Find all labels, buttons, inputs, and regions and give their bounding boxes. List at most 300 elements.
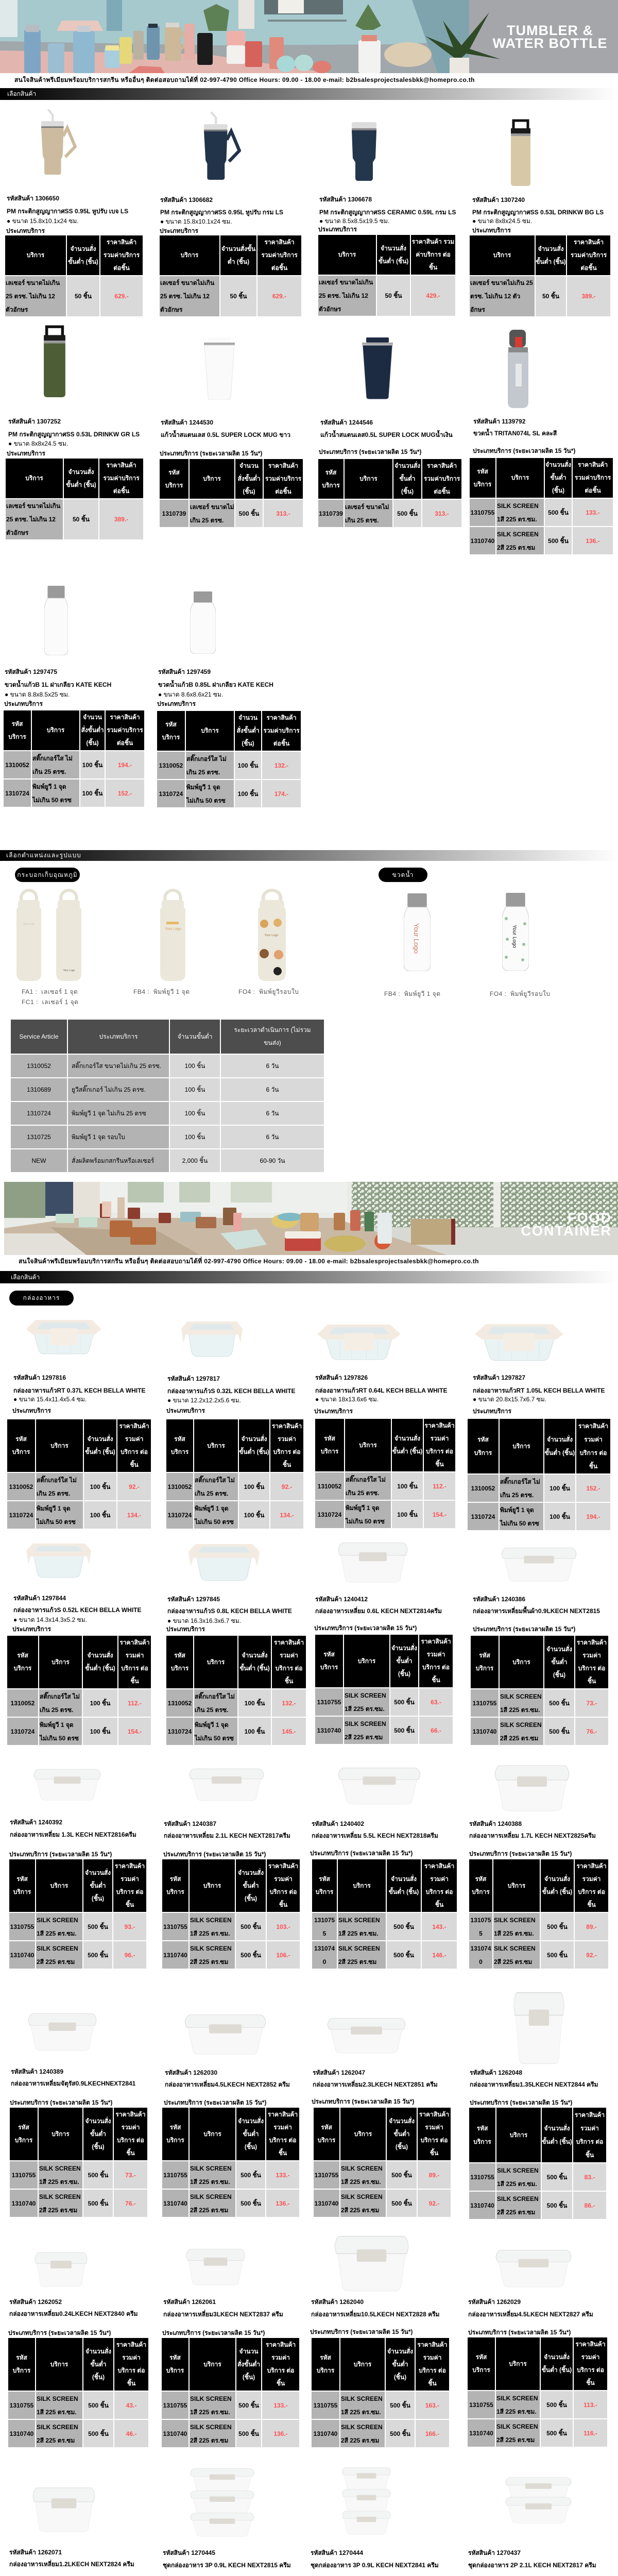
service table: รหัส bbox=[174, 1652, 185, 1659]
service table: รหัส bbox=[174, 1435, 185, 1443]
icon: glass bottle with floral print: Your Logo bbox=[511, 925, 517, 948]
service table: บริการ bbox=[359, 1442, 377, 1449]
product code: รหัสสินค้า 1240388 bbox=[469, 1820, 522, 1827]
service summary table: พิมพ์ยูวี 1 จุด ไม่เกิน 25 ตรซ bbox=[72, 1110, 146, 1117]
service table: 500 ชิ้น bbox=[547, 2202, 567, 2209]
product name: กล่องอาหารเหลี่ยม 1.7L KECH NEXT2825ครีม bbox=[469, 1832, 596, 1839]
service table: 131074 bbox=[314, 1944, 335, 1952]
service table: พิมพ์ยูวี 1 จุด bbox=[40, 1721, 74, 1728]
service table: รวมค่าบริการ bbox=[575, 474, 611, 481]
service table: ตรซ. ไม่เกิน 12 ตัว bbox=[470, 293, 520, 300]
service table: เกิน 25 ตรซ. bbox=[32, 768, 66, 775]
service table: 76.- bbox=[587, 1728, 597, 1735]
service heading: ประเภทบริการ bbox=[12, 1407, 51, 1414]
service table: จำนวนสั่ง bbox=[70, 245, 96, 252]
icon: thermos with base logo bbox=[56, 889, 81, 981]
service table: ต่อชิ้น bbox=[580, 264, 597, 272]
service table: ชิ้น bbox=[429, 264, 437, 271]
service table: 1สี 225 ตร.ซม. bbox=[341, 2178, 381, 2185]
product name: กล่องอาหารเหลี่ยม4.5LKECH NEXT2852 ครีม bbox=[165, 2081, 290, 2088]
service table: 133.- bbox=[273, 2402, 288, 2409]
service table: 1สี 225 ตร.ซม. bbox=[190, 1930, 230, 1937]
service table: 500 ชิ้น bbox=[88, 2171, 108, 2178]
service heading: ประเภทบริการ (ระยะเวลาผลิต 15 วัน*) bbox=[473, 1625, 575, 1633]
service table: 166.- bbox=[425, 2430, 439, 2437]
service table: 132.- bbox=[282, 1699, 296, 1706]
service table: บริการ bbox=[171, 1665, 188, 1672]
service heading: ประเภทบริการ bbox=[318, 226, 357, 233]
product size: ● ขนาด 15.4x11.4x5.4 ซม. bbox=[13, 1396, 87, 1403]
product name: กล่องอาหารเหลี่ยม2.3LKECH NEXT2851 ครีม bbox=[313, 2081, 438, 2088]
service table: SILK SCREEN bbox=[338, 1944, 380, 1952]
service table: 1สี 225 ตร.ซม. bbox=[494, 1930, 534, 1937]
service heading: ประเภทบริการ (ระยะเวลาผลิต 15 วัน*) bbox=[473, 447, 575, 454]
service table: SILK SCREEN bbox=[338, 1917, 380, 1924]
service table: รหัส bbox=[475, 1875, 486, 1883]
product card 1297817 bbox=[166, 1320, 303, 1529]
service table: ค่าบริการ ต่อ bbox=[416, 251, 451, 258]
service table: รวมค่า bbox=[431, 1435, 449, 1442]
service table: 1310755 bbox=[12, 2171, 36, 2178]
service table: ไม่เกิน 50 ตรซ bbox=[195, 1734, 234, 1741]
service table: (ชิ้น) bbox=[86, 739, 99, 747]
service table: บริการ bbox=[47, 726, 64, 734]
service table: SILK SCREEN bbox=[341, 2424, 383, 2431]
service table: 500 ชิ้น bbox=[393, 1952, 414, 1959]
service table: 1310755 bbox=[470, 2173, 494, 2180]
service summary table: 1310052 bbox=[27, 1062, 51, 1070]
product card 1297844 bbox=[7, 1543, 151, 1746]
service table: บริการ ต่อ bbox=[576, 2138, 603, 2145]
service heading: ประเภทบริการ bbox=[166, 1407, 205, 1414]
product code: รหัสสินค้า 1270437 bbox=[468, 2549, 521, 2556]
service table: เกิน 25 ตรซ. bbox=[190, 516, 224, 523]
service table: ราคาสินค้า bbox=[268, 2111, 298, 2118]
service table: พิมพ์ยูวี 1 จุด bbox=[346, 1504, 380, 1512]
product name: ขวดน้ำแก้วB 1L ฝาเกลียว KATE KECH bbox=[5, 681, 111, 688]
service table: จำนวนสั่ง bbox=[241, 1435, 267, 1443]
service table: 1310052 bbox=[318, 1483, 341, 1490]
service heading: ประเภทบริการ (ระยะเวลาผลิต 15 วัน*) bbox=[470, 2099, 572, 2106]
service table: รหัส bbox=[320, 2354, 331, 2361]
service table: ต่ำ (ชิ้น) bbox=[228, 258, 249, 265]
product size: ● ขนาด 18x13.6x6 ซม. bbox=[315, 1396, 379, 1403]
product code: รหัสสินค้า 1240392 bbox=[10, 1819, 62, 1826]
service table: ชิ้น bbox=[430, 2149, 438, 2157]
product card 1262047 bbox=[312, 2017, 451, 2218]
service table: 1310724 bbox=[318, 1511, 341, 1518]
section bar: choose product bbox=[0, 88, 618, 100]
service table: SILK SCREEN bbox=[500, 1721, 542, 1728]
service table: ราคาสินค้า bbox=[266, 2341, 296, 2348]
service table: (ชิ้น) bbox=[242, 740, 254, 747]
service table: 500 ชิ้น bbox=[241, 1923, 261, 1930]
service table: รหัส bbox=[16, 2354, 27, 2361]
service table: บริการ bbox=[203, 1882, 221, 1889]
service table: จำนวนสั่ง bbox=[389, 2117, 415, 2125]
service table: ชิ้น bbox=[130, 1461, 139, 1468]
photo: tall plastic container bbox=[513, 1990, 564, 2064]
service table bbox=[5, 235, 143, 316]
service table: (ชิ้น) bbox=[92, 2143, 105, 2150]
service table: 145.- bbox=[282, 1728, 296, 1735]
service table: 500 ชิ้น bbox=[547, 1923, 568, 1930]
service table: จำนวนสั่ง bbox=[547, 1436, 573, 1443]
service summary table: 100 ชิ้น bbox=[185, 1086, 205, 1093]
service table: บริการ ต่อ bbox=[269, 2137, 296, 2144]
service table: บริการ bbox=[472, 2366, 490, 2374]
service table: 103.- bbox=[276, 1923, 290, 1930]
service table: รวมค่า bbox=[425, 2124, 443, 2131]
service table: 500 ชิ้น bbox=[397, 510, 418, 517]
service table: ไม่เกิน 50 ตรซ bbox=[37, 1518, 76, 1525]
photo: glass food box bbox=[475, 1323, 563, 1361]
section bar: choose position and style: เลือกตำแหน่งและรูปแบบ bbox=[6, 852, 81, 859]
photo: plastic food box bbox=[334, 2234, 409, 2292]
product card 1297827 bbox=[468, 1323, 610, 1532]
service table: (ชิ้น) bbox=[245, 2143, 257, 2150]
service table: SILK SCREEN bbox=[497, 2195, 539, 2202]
service table: จำนวนสั่ง bbox=[68, 468, 94, 475]
service table: 152.- bbox=[118, 789, 132, 796]
service summary table: 1310689 bbox=[27, 1086, 51, 1093]
service table: 1310724 bbox=[159, 790, 183, 798]
product code: รหัสสินค้า 1270445 bbox=[163, 2549, 215, 2556]
service table: 500 ชิ้น bbox=[88, 1923, 108, 1930]
service table: (ชิ้น) bbox=[243, 2373, 255, 2380]
service table: 0 bbox=[479, 1958, 483, 1965]
service table: สติ๊กเกอร์ใส ไม่ bbox=[186, 755, 227, 762]
service table: 1สี 225 ตร.ซม. bbox=[190, 2178, 230, 2185]
product card 1262071 bbox=[8, 2486, 145, 2576]
service table: บริการ bbox=[353, 1882, 371, 1889]
photo: navy mug bbox=[362, 337, 393, 399]
service table: ชิ้น bbox=[127, 2380, 135, 2387]
product name: กล่องอาหารแก้วS 0.52L KECH BELLA WHITE bbox=[13, 1606, 141, 1614]
icon: glass bottle with logo bbox=[404, 893, 431, 971]
service table: ต่อชิ้น bbox=[271, 264, 287, 272]
product code: รหัสสินค้า 1270444 bbox=[311, 2549, 363, 2556]
service table: 1310740 bbox=[12, 2200, 36, 2207]
service table: บริการ ต่อ bbox=[276, 1665, 302, 1672]
service table: บริการ bbox=[354, 2130, 372, 2137]
service table: ต่อชิ้น bbox=[113, 264, 130, 272]
service table: บริการ bbox=[181, 251, 198, 259]
service table: 132.- bbox=[274, 761, 288, 769]
service table: 100 ชิ้น bbox=[90, 1728, 110, 1735]
service heading: ประเภทบริการ bbox=[12, 1625, 51, 1633]
photo: plastic food box bbox=[494, 1764, 570, 1811]
hero banner: food container kitchen scene bbox=[4, 1182, 618, 1255]
service table: 500 ชิ้น bbox=[393, 1923, 414, 1930]
service table: ราคาสินค้า bbox=[577, 1639, 607, 1646]
service table: (ชิ้น) bbox=[92, 1895, 104, 1902]
product code: รหัสสินค้า 1262048 bbox=[470, 2069, 522, 2076]
service table: ต่อชิ้น bbox=[117, 739, 133, 747]
service table: บริการ bbox=[509, 2360, 527, 2367]
service table bbox=[160, 459, 303, 527]
service table: รวมค่า bbox=[584, 1436, 603, 1443]
label: FB4 UV: FB4 : พิมพ์ยูวี 1 จุด bbox=[384, 990, 441, 997]
service table: SILK SCREEN bbox=[341, 2165, 383, 2172]
service table bbox=[314, 1418, 456, 1529]
service table: รวมค่าบริการ bbox=[424, 475, 460, 482]
service table: สั่งขั้นต่ำ bbox=[237, 2361, 260, 2368]
banner title: tumbler and water bottle: TUMBLER & bbox=[507, 23, 593, 38]
product name: กล่องอาหารแก้วRT 1.05L KECH BELLA WHITE bbox=[473, 1387, 605, 1394]
photo: square glass food box bbox=[188, 1543, 260, 1581]
product card 1240386 bbox=[471, 1547, 608, 1746]
service table: บริการ ต่อ bbox=[121, 1448, 148, 1455]
service table: 500 ชิ้น bbox=[88, 2430, 109, 2437]
service table bbox=[8, 1858, 147, 1970]
service summary table: 6 วัน bbox=[266, 1133, 279, 1141]
service table: จำนวนสั่งขั้น bbox=[221, 245, 255, 252]
service table: ต่อชิ้น bbox=[273, 740, 289, 747]
product name: ชุดกล่องอาหาร 2P 2.1L KECH NEXT2817 ครีม bbox=[468, 2562, 596, 2569]
service table: ขั้นต่ำ (ชิ้น) bbox=[389, 1888, 419, 1895]
icon: thermos with wrap print: Your Logo bbox=[264, 934, 279, 937]
service table bbox=[6, 1635, 152, 1746]
product name: กล่องอาหารเหลี่ยม1.35LKECH NEXT2844 ครีม bbox=[470, 2081, 598, 2088]
service table: จำนวนสั่ง bbox=[85, 2347, 111, 2354]
service table: 92.- bbox=[282, 1483, 292, 1490]
service table: SILK SCREEN bbox=[190, 2424, 232, 2431]
service table: จำนวน bbox=[239, 462, 259, 469]
product name: ชุดกล่องอาหาร 3P 0.9L KECH NEXT2841 ครีม bbox=[311, 2562, 439, 2569]
service table: เกิน 25 ตรซ. bbox=[195, 1490, 228, 1497]
service table: รหัส bbox=[169, 2354, 181, 2361]
service table: รวมค่า bbox=[581, 2353, 599, 2361]
service table: รวมค่า bbox=[580, 2125, 599, 2132]
service table: ราคาสินค้า bbox=[110, 714, 140, 721]
service table bbox=[467, 2336, 608, 2448]
section bar: choose product: เลือกสินค้า bbox=[7, 90, 36, 97]
service table: 50 ชิ้น bbox=[73, 516, 90, 523]
service table: รวมค่าบริการ bbox=[261, 251, 298, 259]
service summary table: 6 วัน bbox=[266, 1110, 279, 1117]
service table bbox=[470, 458, 613, 554]
service table: บริการ ต่อ bbox=[419, 2367, 446, 2374]
service table: 25 ตรซ. ไม่เกิน 12 bbox=[160, 293, 210, 300]
service table: 500 ชิ้น bbox=[548, 509, 569, 516]
service table: 389.- bbox=[581, 293, 596, 300]
service table: รหัส bbox=[325, 469, 336, 476]
service table: บริการ ต่อ bbox=[421, 2137, 448, 2144]
product size: ● ขนาด 8.5x8.5x19.5 ซม. bbox=[319, 217, 389, 225]
service table: บริการ bbox=[27, 251, 44, 259]
service table: ไม่เกิน 50 ตรซ bbox=[40, 1734, 79, 1741]
service table: 1สี 225 ตร.ซม. bbox=[497, 2180, 537, 2188]
label: FA1 laser: FA1 : เลเซอร์ 1 จุด bbox=[22, 988, 78, 995]
service table: 1310755 bbox=[317, 1698, 341, 1705]
service table: ราคาสินค้า bbox=[578, 1422, 608, 1430]
service table: ชิ้น bbox=[285, 1677, 293, 1685]
service table: ราคาสินค้า รวม bbox=[412, 238, 454, 245]
product code: รหัสสินค้า 1262061 bbox=[163, 2298, 216, 2306]
product size: ● ขนาด 8.6x8.6x21 ซม. bbox=[158, 691, 223, 698]
product name: PM กระติกสูญญากาศSS 0.95L หูปรับ กรม LS bbox=[160, 209, 283, 216]
service heading: ประเภทบริการ (ระยะเวลาผลิต 15 วัน*) bbox=[312, 2098, 414, 2105]
service table: ราคาสินค้า bbox=[421, 1638, 451, 1645]
service table: 100 ชิ้น bbox=[82, 761, 102, 769]
photo: plastic food box bbox=[35, 2251, 88, 2287]
service table: ไม่เกิน 50 ตรซ bbox=[195, 1518, 234, 1525]
service table: รวมค่า bbox=[125, 1435, 143, 1443]
service table: ขั้นต่ำ bbox=[392, 2361, 408, 2368]
product code: รหัสสินค้า 1139792 bbox=[473, 418, 525, 425]
contact line: สนใจสินค้าพรีเมียมพร้อมบริการสกรีน หรืออื่นๆ ติดต่อสอบถามได้ที่ 02-997-4790 Office Hours: 09.00 - 18.00 e-mail: b2bsalesprojectsalesbkk@homepro.co.th bbox=[14, 76, 475, 83]
service table: บริการ ต่อ bbox=[426, 1448, 453, 1455]
service heading: ประเภทบริการ (ระยะเวลาผลิต 15 วัน*) bbox=[468, 2329, 571, 2336]
service table: รวมค่า bbox=[126, 1652, 144, 1659]
service table: บริการ bbox=[322, 481, 340, 488]
service table: บริการ bbox=[52, 1658, 70, 1665]
service table: รวมค่า bbox=[423, 2354, 441, 2361]
service table: 25 ตรซ. ไม่เกิน 12 bbox=[6, 293, 55, 300]
product code: รหัสสินค้า 1244546 bbox=[320, 419, 373, 426]
service table: SILK SCREEN bbox=[37, 1917, 78, 1924]
service table: เกิน 25 ตรซ. bbox=[345, 516, 379, 523]
service table: รหัส bbox=[321, 2124, 332, 2131]
product code: รหัสสินค้า 1297816 bbox=[13, 1374, 66, 1381]
service table bbox=[470, 235, 610, 316]
service table: 73.- bbox=[125, 2171, 136, 2178]
product size: ● ขนาด 16.3x16.3x6.7 ซม. bbox=[167, 1617, 241, 1624]
service table: รวมค่า bbox=[121, 1875, 139, 1883]
service table: 136.- bbox=[273, 2430, 288, 2437]
service table: บริการ bbox=[203, 2130, 221, 2137]
service table: SILK SCREEN bbox=[37, 1944, 78, 1952]
service table: ชิ้น bbox=[435, 1901, 443, 1908]
service table: รวมค่า bbox=[273, 2124, 292, 2131]
service table: 1310740 bbox=[163, 2430, 187, 2437]
service table: จำนวน bbox=[239, 2347, 258, 2354]
service table: รวมค่า bbox=[280, 1652, 298, 1659]
service table: บริการ bbox=[165, 481, 183, 488]
service table: (ชิ้น) bbox=[394, 2373, 406, 2380]
service table: เลเซอร์ ขนาดไม่เกิน bbox=[319, 279, 373, 286]
service table: ตัวอักษร bbox=[6, 529, 28, 536]
service table: บริการ bbox=[474, 1449, 492, 1456]
service table bbox=[318, 459, 461, 527]
service table: บริการ bbox=[50, 2361, 68, 2368]
service table: 2สี 225 ตร.ซม bbox=[190, 1958, 228, 1965]
product name: กล่องอาหารแก้วS 0.32L KECH BELLA WHITE bbox=[167, 1387, 295, 1395]
service heading: ประเภทบริการ bbox=[314, 1408, 353, 1415]
service summary table: ประเภทบริการ bbox=[99, 1032, 138, 1040]
icon: glass bottle with logo: Your Logo bbox=[413, 923, 420, 954]
product card 1240392 bbox=[9, 1768, 146, 1969]
service table: รหัส bbox=[168, 469, 180, 476]
service table: ขั้นต่ำ (ชิ้น) bbox=[545, 1449, 575, 1456]
service table: จำนวนสั่ง bbox=[394, 462, 420, 469]
service table: (ชิ้น) bbox=[553, 1671, 565, 1679]
service table: เลเซอร์ ขนาดไม่ bbox=[190, 503, 234, 510]
service table: รวมค่า bbox=[271, 2354, 290, 2361]
service table: จำนวนสั่ง bbox=[87, 1435, 113, 1443]
service table: 2สี 225 ตร.ซม bbox=[497, 544, 535, 551]
service table: 500 ชิ้น bbox=[239, 510, 259, 517]
service table: 1310740 bbox=[10, 1952, 34, 1959]
service table: (ชิ้น) bbox=[396, 2143, 408, 2150]
service table: บริการ bbox=[321, 1448, 338, 1455]
service table: บริการ bbox=[166, 1888, 184, 1895]
service table: รหัส bbox=[18, 2124, 29, 2131]
service table: 112.- bbox=[128, 1699, 142, 1706]
photo: square glass food box bbox=[26, 1543, 91, 1578]
product code: รหัสสินค้า 1240386 bbox=[473, 1596, 525, 1603]
service table: 100 ชิ้น bbox=[238, 761, 258, 769]
service table: จำนวนสั่ง bbox=[85, 1869, 111, 1876]
service table: สติ๊กเกอร์ใส ไม่ bbox=[500, 1478, 540, 1485]
service table: บริการ bbox=[171, 1448, 188, 1455]
service table: SILK SCREEN bbox=[341, 2395, 383, 2402]
service table: สติ๊กเกอร์ใส ไม่ bbox=[37, 1477, 77, 1484]
service table: 73.- bbox=[587, 1699, 597, 1706]
icon: thermos with small laser logo: Your Logo bbox=[23, 923, 35, 926]
service table: ราคาสินค้า bbox=[272, 1422, 302, 1430]
service table: ต่อชิ้น bbox=[275, 488, 291, 495]
service heading: ประเภทบริการ (ระยะเวลาผลิต 15 วัน*) bbox=[319, 448, 421, 455]
service table: อักษร bbox=[470, 306, 485, 313]
service table: 500 ชิ้น bbox=[549, 1728, 570, 1735]
service table: 1310724 bbox=[11, 1728, 35, 1735]
service table: 500 ชิ้น bbox=[238, 2430, 259, 2437]
service table bbox=[6, 1418, 152, 1530]
product card 1262048 bbox=[469, 1990, 606, 2221]
service heading: ประเภทบริการ (ระยะเวลาผลิต 15 วัน*) bbox=[163, 1851, 266, 1858]
service table: 93.- bbox=[125, 1923, 135, 1930]
service table: 1310724 bbox=[471, 1513, 495, 1520]
service table: 2สี 225 ตร.ซม bbox=[345, 1733, 383, 1740]
service summary table: 100 ชิ้น bbox=[185, 1110, 205, 1117]
photo: white mug bbox=[204, 343, 235, 400]
service table: จำนวนสั่ง bbox=[544, 2353, 570, 2361]
service table: บริการ ต่อ bbox=[116, 1888, 143, 1895]
service table: จำนวนสั่ง bbox=[538, 245, 564, 252]
product code: รหัสสินค้า 1240412 bbox=[315, 1596, 368, 1603]
pill: water bottle: ขวดน้ำ bbox=[392, 871, 414, 878]
product card 1262061 bbox=[162, 2248, 299, 2448]
service table: รหัส bbox=[479, 1652, 490, 1659]
service table: ขั้นต่ำ bbox=[551, 474, 566, 481]
service table bbox=[467, 1418, 611, 1531]
service summary table: 100 ชิ้น bbox=[185, 1062, 205, 1070]
product name: ขวดน้ำแก้วB 0.85L ฝาเกลียว KATE KECH bbox=[158, 681, 273, 688]
service table: 194.- bbox=[586, 1513, 600, 1520]
service table: 43.- bbox=[126, 2402, 136, 2409]
service table: ราคาสินค้า bbox=[578, 461, 608, 468]
service table: 2สี 225 ตร.ซม bbox=[494, 1958, 532, 1965]
service table: บริการ bbox=[207, 1658, 225, 1665]
service table: 1310755 bbox=[314, 2402, 337, 2409]
product code: รหัสสินค้า 1297827 bbox=[473, 1374, 525, 1381]
section bar: choose position and style bbox=[0, 850, 618, 861]
service table: 2สี 225 ตร.ซม bbox=[496, 2436, 535, 2443]
service table bbox=[470, 1635, 609, 1746]
service table: 2สี 225 ตร.ซม bbox=[190, 2437, 228, 2444]
service table: ชิ้น bbox=[283, 1461, 291, 1468]
service table: ต่อชิ้น bbox=[585, 487, 601, 494]
service table: ขั้นต่ำ bbox=[394, 2130, 409, 2137]
service table: SILK SCREEN bbox=[345, 1692, 386, 1699]
service table: เลเซอร์ ขนาดไม่เกิน bbox=[160, 279, 214, 286]
service table: ราคาสินค้า bbox=[115, 2111, 146, 2118]
service table: 1310740 bbox=[470, 2202, 494, 2209]
label: FC1 laser: FC1 : เลเซอร์ 1 จุด bbox=[22, 998, 79, 1006]
service table: 2สี 225 ตร.ซม bbox=[338, 1958, 376, 1965]
